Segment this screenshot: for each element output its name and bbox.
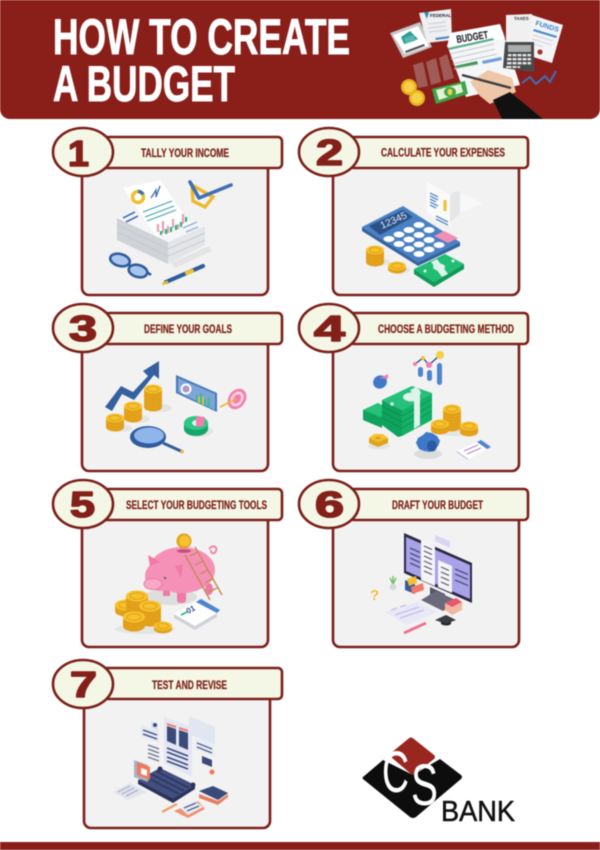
heading bar: [350, 489, 528, 520]
icon: pie chart: [371, 373, 389, 391]
icon: funds form: [527, 15, 563, 63]
icon: piggy bank: [143, 546, 216, 605]
icon: magnifying glass: [130, 426, 184, 453]
icon: long document: [148, 717, 192, 777]
icon: federal form: [419, 9, 452, 43]
icon: trend arrow: [522, 71, 556, 84]
icon: orange folder: [134, 760, 150, 782]
icon: desk calendar: [174, 599, 220, 630]
panel: step 2 frame: [333, 152, 519, 295]
logo wordmark: BANK: [441, 796, 516, 828]
heading bar: TALLY YOUR INCOME: [141, 148, 229, 160]
icon: check mark badge: [190, 182, 231, 207]
icon: calculator: [362, 206, 460, 266]
number badge 7: 7: [70, 664, 97, 705]
panel: step 1 frame: [82, 152, 268, 295]
icon: ladder: [185, 547, 222, 600]
header banner: [0, 0, 600, 119]
logo letter C: C: [382, 740, 409, 805]
icon: bar and line chart: [413, 351, 444, 385]
icon: budget sheet: BUDGET: [456, 29, 489, 46]
icon: coins: [431, 404, 479, 436]
icon: calculator: [503, 42, 534, 72]
icon: coin stacks: [115, 590, 175, 634]
icon: orange pencil: [162, 804, 177, 812]
icon: glasses: [109, 252, 151, 279]
panel: step 3 frame: [82, 328, 268, 471]
heading bar: [350, 313, 528, 344]
panel: step 5 frame: [82, 504, 268, 647]
icon: hand with pen: [462, 70, 543, 119]
title: [53, 9, 350, 112]
icon: stacked books: [445, 598, 462, 615]
icon: closed book: [199, 786, 228, 805]
icon: coin stacks: [106, 384, 172, 432]
icon: falling coin: [176, 534, 192, 548]
title: A BUDGET: [53, 56, 235, 112]
number badge 5: 5: [70, 484, 95, 525]
icon: notepad: [457, 440, 491, 460]
icon: calculator: 12345: [379, 210, 409, 232]
icon: yellow nut: [368, 434, 390, 450]
icon: graduation cap: [435, 615, 456, 626]
step 2: calculate your expenses: [299, 128, 528, 295]
header illustration: budget paperwork: [390, 9, 563, 119]
icon: speech bubbles: [141, 716, 215, 774]
step 4: choose a budgeting method: [299, 304, 528, 471]
icon: books: [405, 576, 424, 594]
icon: bars: [413, 54, 454, 88]
icon: target with dart: [220, 385, 250, 413]
icon: taxes form: [506, 14, 533, 44]
icon: paper stack with report: [117, 180, 212, 268]
icon: monitor with spreadsheets: [404, 533, 472, 611]
step 5: select your budgeting tools: [53, 480, 282, 647]
icon: blue gear: [414, 432, 442, 459]
panel: step 4 frame: [333, 328, 519, 471]
number badge 3: 3: [69, 308, 97, 349]
logo black diamond: [362, 759, 462, 818]
icon: taxes form: TAXES: [514, 16, 529, 21]
heading bar: [100, 137, 282, 168]
icon: funds form: FUNDS: [534, 20, 560, 34]
heading bar: SELECT YOUR BUDGETING TOOLS: [126, 500, 267, 512]
icon: coins: [366, 246, 410, 274]
number badge 6: 6: [315, 484, 344, 525]
icon: note sheet: [113, 783, 147, 800]
heading bar: [100, 668, 282, 699]
number badge 1: [53, 128, 113, 176]
icon: banknotes: [414, 254, 464, 287]
number badge 1: 1: [68, 133, 89, 174]
icon: receipt: [427, 182, 483, 227]
heading bar: DEFINE YOUR GOALS: [144, 324, 232, 336]
icon: open notebook: [174, 801, 205, 818]
number badge 2: 2: [316, 132, 343, 173]
logo: CS Bank: [362, 738, 516, 828]
icon: house card: [390, 22, 432, 58]
icon: desk calendar: 01: [185, 603, 197, 616]
heading bar: TEST AND REVISE: [152, 680, 227, 692]
step 3: define your goals: [53, 304, 282, 471]
icon: paper sheet: [385, 602, 438, 625]
icon: question mark: ?: [370, 587, 379, 604]
icon: banknotes: [432, 81, 468, 104]
number badge 2: [299, 128, 359, 176]
icon: cash stacks: [363, 386, 432, 437]
icon: typewriter: [138, 766, 196, 803]
icon: budget sheet: [447, 24, 520, 97]
step 1: tally your income: [53, 128, 282, 295]
heading bar: DRAFT YOUR BUDGET: [392, 500, 483, 512]
step 7: test and revise: [53, 660, 282, 828]
logo letter S: S: [411, 753, 438, 818]
heading bar: [100, 313, 282, 344]
number badge 7: [53, 660, 113, 708]
icon: federal form: FEDERAL: [430, 13, 452, 18]
number badge 3: [53, 304, 113, 352]
icon: pen: [163, 266, 203, 284]
heading bar: [100, 489, 282, 520]
heading bar: [350, 137, 528, 168]
title: HOW TO CREATE: [53, 9, 350, 65]
icon: pencil: [404, 623, 426, 633]
panel: step 6 frame: [333, 504, 519, 647]
number badge 4: 4: [314, 308, 345, 349]
icon: dashboard panel: [176, 375, 217, 412]
icon: ring chart: [184, 416, 213, 437]
heading bar: CALCULATE YOUR EXPENSES: [381, 148, 505, 160]
icon: plant: [390, 576, 396, 590]
icon: rising arrow: [105, 361, 159, 411]
panel: step 7 frame: [84, 684, 270, 828]
number badge 6: [299, 480, 359, 528]
step 6: draft your budget: [299, 480, 528, 647]
icon: gold coins: [401, 79, 425, 106]
footer band: [0, 842, 600, 850]
number badge 4: [299, 304, 359, 352]
number badge 5: [53, 480, 113, 528]
logo red diamond: [390, 738, 435, 775]
heading bar: CHOOSE A BUDGETING METHOD: [378, 324, 514, 336]
